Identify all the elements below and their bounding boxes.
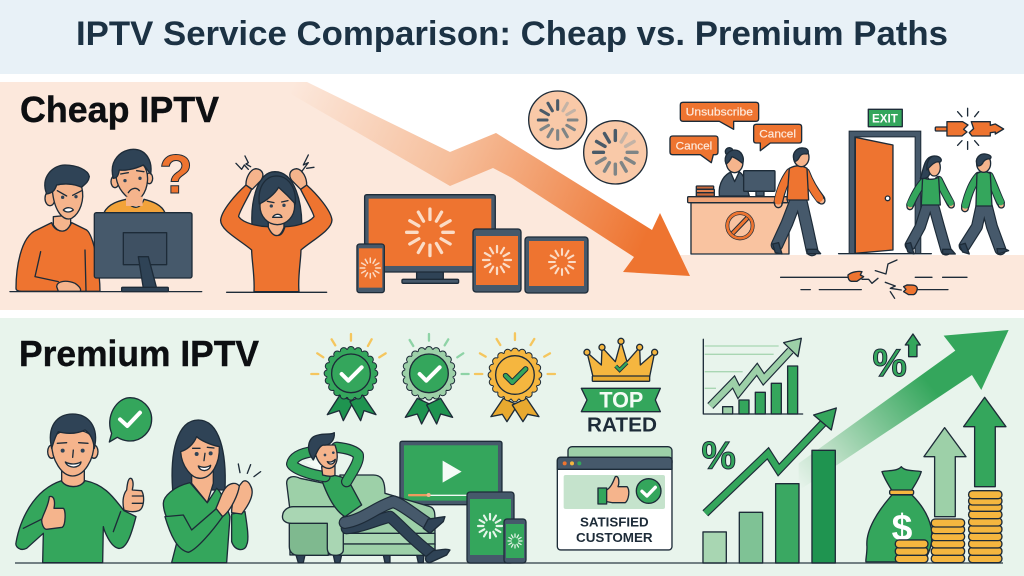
woman walking out	[905, 156, 955, 254]
heading: cheap IPTV: Cheap IPTV	[20, 89, 219, 130]
panel: cheap IPTV	[0, 82, 1024, 310]
money bag, coins and up arrows	[866, 397, 1006, 563]
large growth bars with arrow: %	[701, 434, 736, 477]
icon: money bag: $	[892, 506, 913, 548]
exit door	[839, 134, 931, 254]
medal: gold	[475, 333, 555, 422]
wide tablet	[525, 237, 588, 293]
icon: crown	[584, 338, 658, 381]
small tablet and phone	[467, 492, 526, 563]
small growth chart	[703, 338, 803, 414]
tall coin stack	[969, 491, 1002, 563]
exit sign	[868, 109, 902, 127]
speech bubble: cancel left: Cancel	[676, 140, 712, 152]
broken plug sign	[935, 108, 1004, 149]
happy woman clapping	[163, 420, 261, 563]
tablet	[473, 229, 521, 292]
stressed woman	[221, 155, 332, 292]
television	[400, 441, 502, 505]
exit sign: EXIT	[872, 113, 898, 126]
icon: check	[636, 479, 661, 503]
frustrated viewers at monitor: ?	[159, 143, 193, 205]
medal: green	[311, 334, 386, 421]
reclining man	[292, 433, 450, 563]
frustrated viewers at monitor	[10, 143, 202, 292]
cancellation desk	[670, 102, 1009, 298]
phone	[357, 244, 384, 293]
speech bubble: cancel left	[670, 136, 718, 163]
speech bubble: unsubscribe	[680, 102, 759, 129]
satisfied customer card	[557, 447, 672, 550]
title banner	[0, 0, 1024, 74]
speech bubble: unsubscribe: Unsubscribe	[686, 107, 753, 119]
relaxing man on sofa with devices	[282, 433, 502, 563]
arrow: falling trend	[270, 82, 690, 276]
icon: thumbs up	[598, 476, 629, 504]
sofa	[282, 475, 435, 563]
desk	[688, 197, 789, 254]
heading: premium IPTV: Premium IPTV	[19, 333, 259, 374]
small coin stack	[895, 540, 928, 563]
television	[365, 195, 495, 283]
satisfied customer card: CUSTOMER	[576, 531, 653, 545]
customer leaving	[773, 148, 825, 254]
top rated badge	[581, 338, 660, 437]
buffering spinners	[529, 91, 647, 184]
top rated badge: TOP	[599, 388, 643, 413]
icon: approval bubble	[109, 398, 152, 442]
large growth bars with arrow	[701, 408, 836, 563]
medium coin stack	[931, 519, 965, 563]
medal: light green	[405, 334, 469, 424]
title banner: IPTV Service Comparison: Cheap vs. Premium Paths	[76, 15, 948, 53]
percent up icon: %	[872, 342, 907, 385]
happy man with thumbs up	[16, 398, 152, 563]
speech bubble: cancel right: Cancel	[759, 128, 796, 140]
top rated badge: RATED	[587, 415, 657, 437]
loading devices	[357, 195, 588, 293]
panel: premium IPTV	[0, 318, 1024, 576]
arrow: rising trend	[799, 330, 1009, 491]
disconnected cables on floor	[781, 260, 967, 298]
badges: quality medals	[311, 333, 555, 424]
man walking out	[959, 154, 1009, 254]
satisfied customer card: SATISFIED	[580, 516, 649, 530]
icon: money bag	[866, 467, 932, 562]
percent up icon	[872, 334, 920, 385]
receptionist	[719, 148, 749, 196]
speech bubble: cancel right	[754, 124, 802, 151]
